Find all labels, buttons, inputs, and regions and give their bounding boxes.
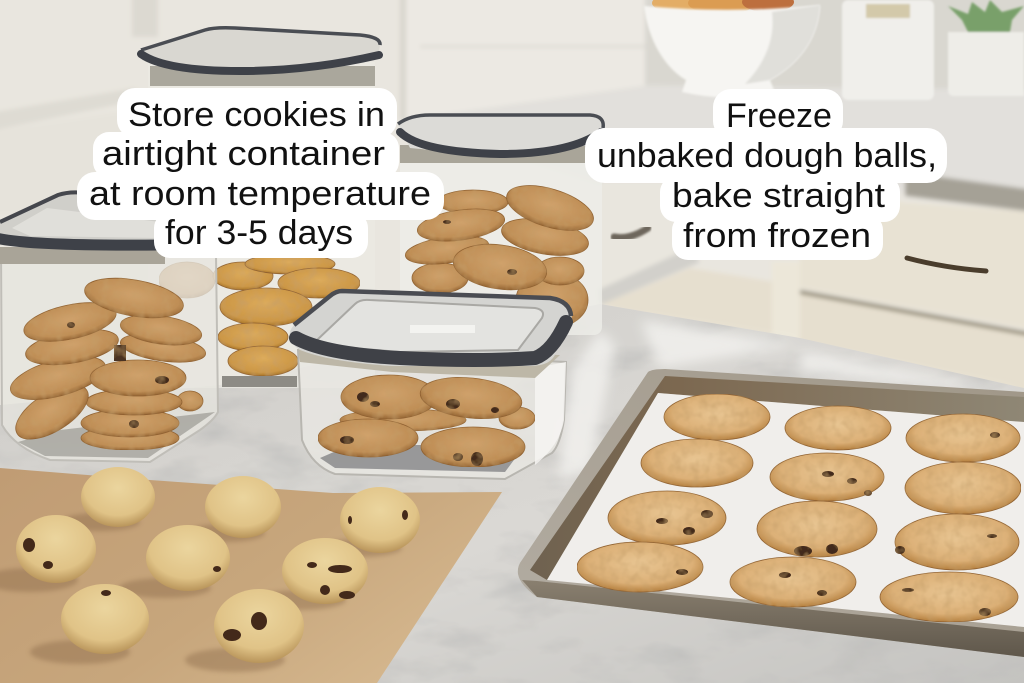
callout background: freeze dough	[585, 89, 947, 260]
left container cookies	[6, 272, 207, 450]
kitchen background	[0, 0, 1024, 410]
callout: store cookies	[77, 88, 444, 258]
bowl with fruit	[644, 0, 820, 98]
baking parchment	[0, 468, 502, 683]
callout text: freeze dough: from frozen	[683, 217, 871, 255]
shadows under dough balls	[0, 513, 402, 672]
callout text: store cookies	[89, 96, 431, 252]
canister	[842, 0, 934, 100]
cookie dough balls	[16, 467, 420, 663]
container: back tall	[141, 28, 380, 388]
callout: freeze dough	[585, 89, 947, 260]
marble counter	[0, 304, 1024, 683]
container: front with lid	[290, 291, 572, 479]
callout background: store cookies	[77, 88, 444, 258]
callout text: store cookies: at room temperature	[89, 175, 431, 213]
callout text: store cookies: Store cookies in	[128, 96, 385, 134]
callout text: freeze dough: unbaked dough balls,	[597, 137, 937, 175]
callout text: freeze dough: Freeze	[726, 97, 832, 135]
right container cookies	[404, 177, 599, 328]
baking tray	[518, 369, 1024, 657]
callout text: store cookies: airtight container	[102, 135, 385, 173]
drawer handles	[614, 228, 986, 271]
callout text: freeze dough: bake straight	[672, 177, 886, 215]
plant pot	[948, 0, 1024, 96]
container: left with cookies	[0, 192, 218, 462]
front container cookies	[318, 373, 535, 467]
counter reflections	[558, 320, 1024, 480]
baked cookies on tray	[577, 394, 1021, 622]
back container cookies	[159, 254, 360, 376]
callout text: store cookies: for 3-5 days	[165, 214, 353, 252]
callout text: freeze dough	[597, 97, 937, 255]
container: right tall	[398, 115, 603, 335]
